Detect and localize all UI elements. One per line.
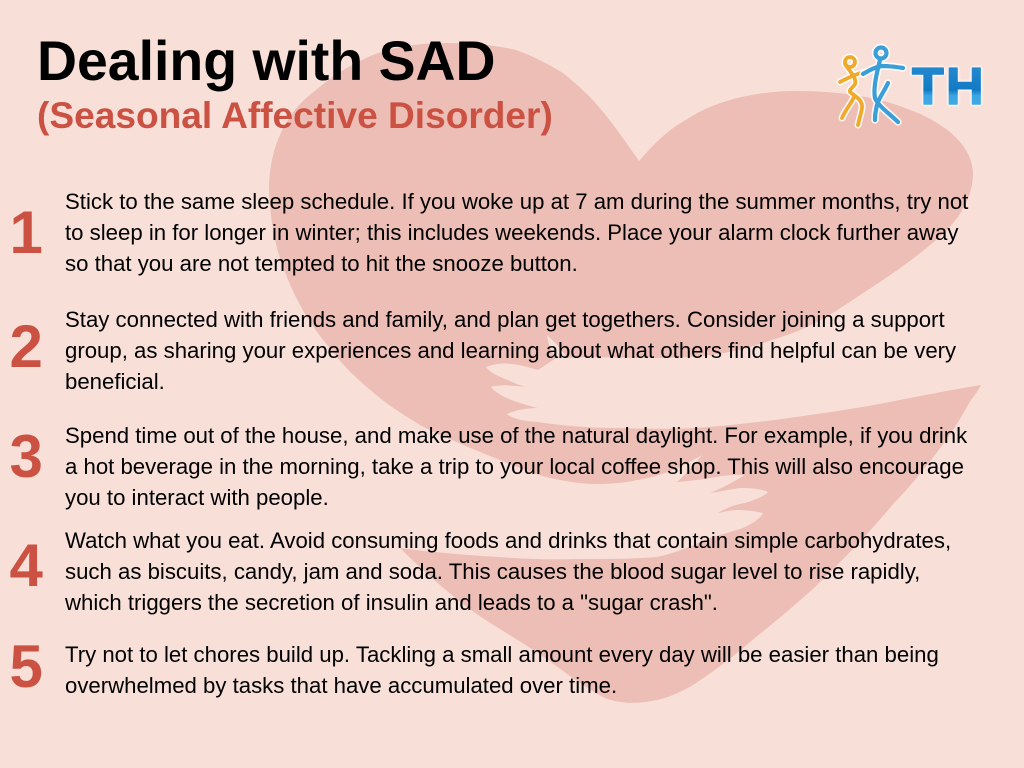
number 1: 1 — [10, 199, 43, 266]
tip 2 — [10, 307, 956, 394]
logo letters: TH — [912, 58, 984, 116]
title: Dealing with SAD — [37, 30, 496, 92]
number 5: 5 — [10, 633, 43, 700]
tip 2 text: group, as sharing your experiences and learning about what others find helpful can be very — [65, 338, 956, 363]
logo: TH with two dancing figures — [836, 44, 984, 128]
tip 5 text: Try not to let chores build up. Tackling a small amount every day will be easier than being — [65, 642, 939, 667]
tip 4 text — [65, 528, 951, 615]
tip 4 — [10, 528, 951, 615]
number 2: 2 — [10, 313, 43, 380]
tip 5 — [10, 633, 939, 700]
tip 3 text: a hot beverage in the morning, take a trip to your local coffee shop. This will also encourage — [65, 454, 964, 479]
tip 1 text — [65, 189, 968, 276]
tip 2 text: beneficial. — [65, 369, 165, 394]
number 3: 3 — [10, 423, 43, 490]
tip 2 text — [65, 307, 956, 394]
tip 1 — [10, 189, 968, 276]
tip 4 text: such as biscuits, candy, jam and soda. This causes the blood sugar level to rise rapidly, — [65, 559, 920, 584]
tip 3 text — [65, 423, 968, 510]
icon: blue figure — [863, 48, 903, 122]
subtitle: (Seasonal Affective Disorder) — [37, 94, 553, 136]
tip 2 text: Stay connected with friends and family, and plan get togethers. Consider joining a support — [65, 307, 945, 332]
tip 3 — [10, 423, 968, 510]
tip 3 text: Spend time out of the house, and make use of the natural daylight. For example, if you drink — [65, 423, 967, 448]
tip 1 text: Stick to the same sleep schedule. If you woke up at 7 am during the summer months, try not — [65, 189, 968, 214]
tip 4 text: which triggers the secretion of insulin and leads to a "sugar crash". — [65, 590, 718, 615]
number 4: 4 — [10, 532, 43, 599]
tip 1 text: to sleep in for longer in winter; this includes weekends. Place your alarm clock further away — [65, 220, 958, 245]
tip 3 text: you to interact with people. — [65, 485, 329, 510]
icon: orange figure — [840, 57, 865, 125]
tip 5 text: overwhelmed by tasks that have accumulated over time. — [65, 673, 617, 698]
tip 4 text: Watch what you eat. Avoid consuming foods and drinks that contain simple carbohydrates, — [65, 528, 951, 553]
tip 1 text: so that you are not tempted to hit the snooze button. — [65, 251, 578, 276]
tip 5 text — [65, 642, 939, 698]
